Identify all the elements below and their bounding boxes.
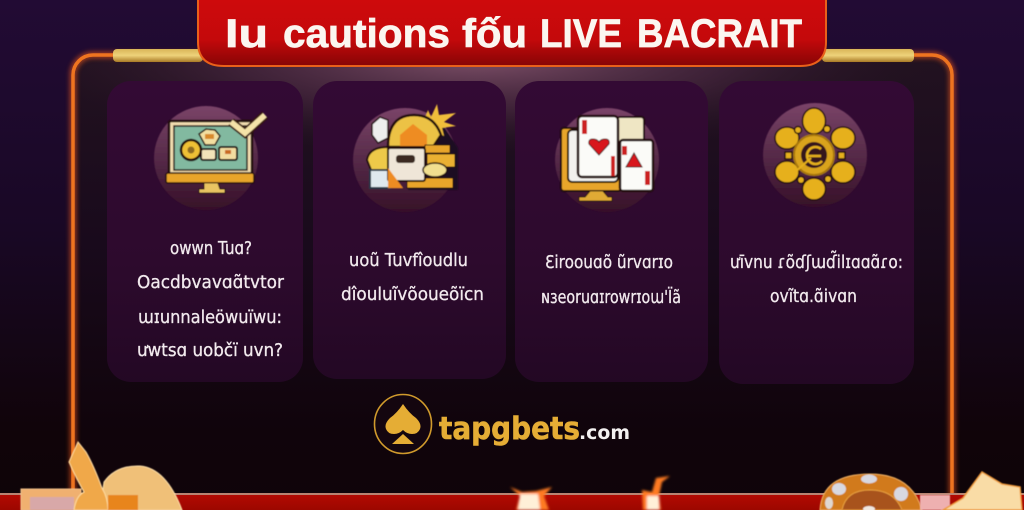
card 1 text: owwn Tuɑ?	[170, 238, 252, 259]
neon frame panel	[73, 55, 952, 510]
card 3 text: ɴɜeoruɑɪrowrɪoɯ'Ïã	[541, 287, 681, 308]
panel: card 1	[107, 81, 303, 382]
title banner	[198, 0, 826, 66]
card 4 text: ưīvnu ɾõɗʃɯɗ̃ilɪɑɑɑ̃ɾo:	[730, 251, 903, 273]
icon: monitor with check mark	[154, 106, 265, 210]
logo wordmark: tapgbets	[439, 411, 580, 447]
gold bar right	[822, 49, 914, 62]
card 4 text	[730, 251, 903, 307]
card 1 text	[137, 238, 285, 361]
card 2 text	[341, 250, 484, 305]
card 3 text: Ɛiroouɑõ ũrvɑrɪo	[545, 252, 673, 273]
card 2 text: dîouluĩvõoueõïcn	[341, 284, 484, 305]
bottom red strip	[0, 493, 1024, 510]
decoration: right chip	[820, 474, 922, 510]
card 4 text: ovĩtɑ.ɑ̃ivɑn	[770, 286, 857, 307]
icon: playing cards on monitor	[555, 108, 659, 212]
title text: cautions	[283, 12, 450, 56]
decoration: left horn and fan	[21, 442, 182, 510]
title text: LIVE	[540, 12, 622, 56]
title text: BACRAIT	[637, 12, 802, 56]
panel: card 4	[719, 81, 914, 384]
logo badge with spade	[374, 394, 432, 454]
logo domain: .com	[579, 422, 630, 444]
card 2 text: uoũ Tuvfîoudlu	[349, 250, 468, 271]
title text: fốu	[462, 12, 527, 56]
gold bar left	[113, 49, 203, 62]
icon: gold flower medallion	[763, 103, 867, 207]
title text: Ιu	[225, 12, 268, 56]
card 1 text: ɯɪunnaleöwuïwu:	[138, 307, 282, 328]
card 1 text: ưwtsɑ uobčï uvn?	[137, 340, 283, 361]
panel: card 2	[313, 81, 506, 379]
decoration: right book	[920, 472, 1022, 510]
decoration: flame left	[510, 487, 552, 510]
icon: gold temple and stacks	[353, 104, 458, 212]
logo: tapgbets.com	[374, 394, 630, 454]
card 3 text	[541, 252, 681, 308]
card 1 text: Oacdbvavɑɑ̃tvtor	[137, 272, 285, 293]
decoration: flame right	[642, 476, 670, 510]
panel: card 3	[515, 81, 708, 382]
title text	[225, 12, 802, 56]
